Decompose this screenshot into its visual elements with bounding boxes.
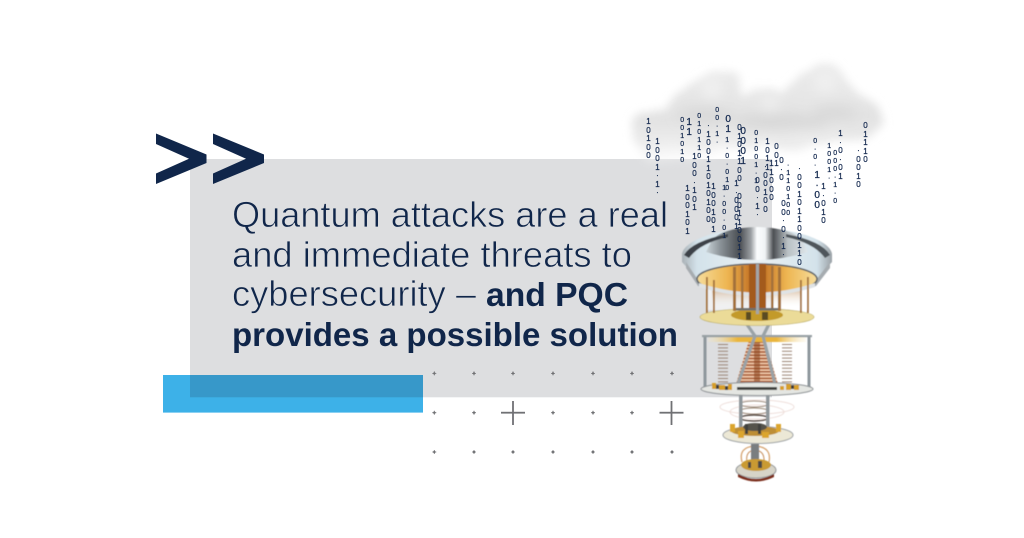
main chamber — [701, 316, 813, 396]
text: 11 — [686, 117, 692, 138]
dot and plus grid — [432, 371, 684, 454]
quantum computer cryostat — [682, 227, 832, 482]
text: ·10011010100 — [706, 121, 711, 224]
text: 1·0·010 — [725, 137, 729, 192]
text: 01001·1 — [754, 130, 758, 185]
text: 1·0001 — [734, 179, 739, 230]
text: 0·0 — [779, 156, 784, 182]
grey text panel — [190, 159, 772, 397]
text: 1001· — [827, 143, 831, 182]
lower small stage — [720, 393, 794, 444]
yellow mid plate — [700, 308, 814, 326]
text: 0·0· — [813, 138, 817, 169]
text: 11000 — [769, 159, 774, 202]
top dish — [682, 227, 832, 314]
text: 1·00·01 — [722, 185, 726, 240]
text: 0001 — [740, 126, 746, 167]
text: 100·101 — [692, 152, 697, 212]
text: 00·0·1· — [781, 199, 786, 259]
headline — [232, 194, 678, 354]
text: 01110 — [863, 121, 868, 164]
text: 1011 — [765, 137, 770, 172]
text: 00·1· — [715, 107, 719, 146]
headline: cybersecurity – — [232, 273, 476, 314]
text: ·00100 — [763, 162, 768, 214]
binary rain digits — [646, 106, 868, 266]
text: 00·1· — [755, 176, 760, 219]
text: ·00101100110 — [797, 164, 802, 266]
headline: Quantum attacks are a real — [232, 194, 668, 235]
text: 10100 — [646, 117, 651, 160]
text: 01 — [725, 114, 731, 135]
text: 1001·1· — [655, 137, 660, 197]
text: 0101100 — [737, 123, 742, 183]
text: 1·010 — [821, 182, 826, 225]
gold interior — [697, 264, 817, 294]
double chevron icon — [156, 134, 264, 184]
text: 001 — [774, 142, 779, 168]
text: 100101 — [685, 184, 690, 236]
illustration layer — [156, 62, 884, 482]
text: ·110100 — [786, 162, 790, 217]
headline: and PQC — [486, 277, 628, 314]
silver dome — [706, 227, 808, 260]
copper coil cone — [736, 341, 778, 383]
text: 100101 — [711, 182, 716, 234]
text: 00110011 — [737, 192, 742, 260]
text: 010110 — [697, 113, 701, 160]
text: 000·1·0 — [833, 150, 837, 205]
upper gold chamber rods — [706, 280, 808, 310]
text: 1·00 — [814, 170, 820, 211]
text: ·0010 — [856, 146, 861, 189]
headline: provides a possible solution — [232, 317, 678, 354]
text: 1·0·01 — [838, 129, 843, 180]
silver struts — [735, 316, 777, 392]
cloud — [634, 65, 884, 163]
blue accent bar — [163, 375, 423, 413]
headline: and immediate threats to — [232, 234, 632, 275]
bottom stage — [736, 444, 776, 482]
text: 001010 — [680, 117, 684, 164]
